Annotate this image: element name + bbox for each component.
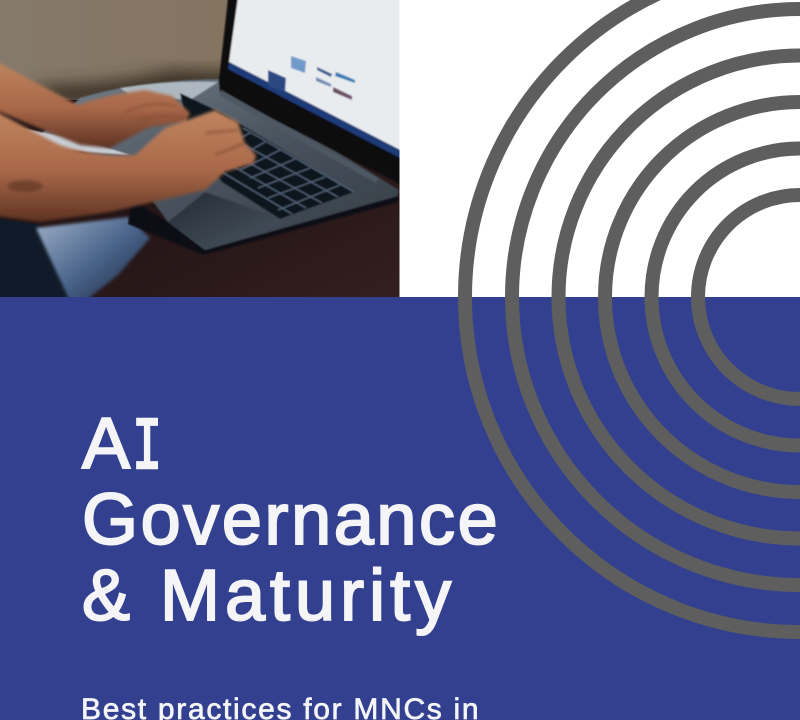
title: & Maturity <box>82 556 456 636</box>
laptop base and keyboard <box>20 79 399 255</box>
panel: blue lower band <box>0 297 800 720</box>
upper hand and forearm <box>0 58 190 148</box>
title: A <box>82 404 133 484</box>
lower hand and forearm <box>0 108 256 222</box>
table <box>0 100 400 297</box>
title: Governance <box>82 480 500 560</box>
title <box>80 404 500 636</box>
laptop screen <box>219 0 410 189</box>
photo: hands typing on a laptop <box>0 0 400 297</box>
background wall <box>0 0 229 100</box>
title: I <box>132 407 162 491</box>
